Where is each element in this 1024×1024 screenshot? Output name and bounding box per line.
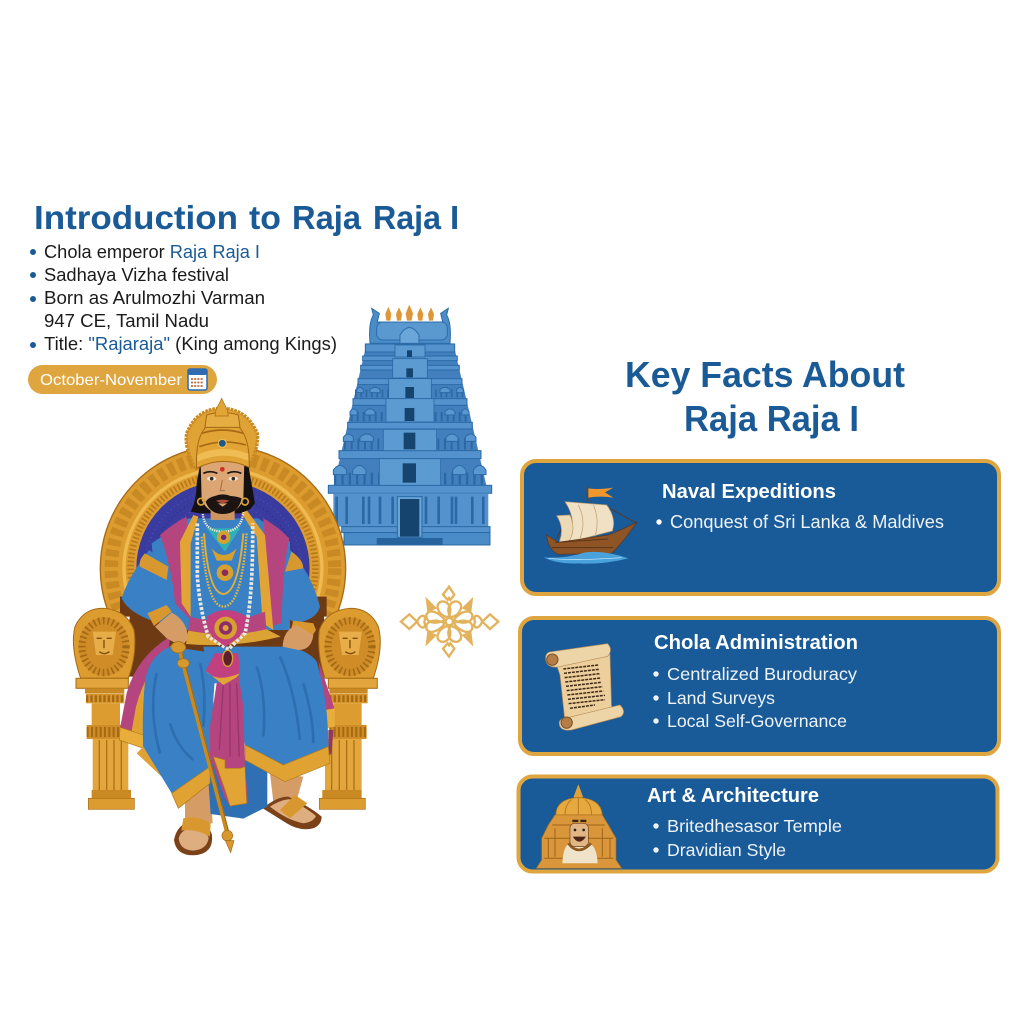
text: chola administration: Local Self-Governance (667, 711, 847, 731)
date pill: October-November: October-November (40, 372, 183, 389)
icon: palm-leaf scroll (546, 644, 624, 730)
panel: chola administration (520, 618, 999, 754)
text: naval expeditions: Naval Expeditions (662, 481, 836, 503)
king: royal staff (171, 642, 234, 853)
throne back (100, 450, 346, 617)
throne arm: right lion and pillar (319, 608, 380, 809)
illustration: gopuram temple tower (328, 305, 492, 545)
panel: introduction (28, 199, 459, 394)
bullet list: introduction facts: Chola emperor Raja Raja I (44, 242, 260, 262)
king: torso and arms (122, 510, 320, 650)
heading: key facts: Raja Raja I (684, 398, 859, 439)
bullet list: introduction facts: 947 CE, Tamil Nadu (44, 311, 209, 331)
throne arm: left lion and pillar (73, 608, 135, 809)
bullet list: introduction facts: Born as Arulmozhi Varman (44, 288, 265, 308)
illustration: seated king Raja Raja I on throne (73, 398, 380, 855)
text: chola administration (653, 632, 858, 731)
title: introduction: Raja (292, 199, 362, 236)
bullet list: introduction facts: Sadhaya Vizha festival (44, 265, 229, 285)
text: chola administration: Land Surveys (667, 688, 775, 708)
text: chola administration: Chola Administration (654, 632, 858, 654)
text: naval expeditions (656, 481, 944, 532)
title: introduction (34, 199, 459, 236)
text: chola administration: Centralized Buroduracy (667, 664, 857, 684)
text: art and architecture: Britedhesasor Temple (667, 816, 842, 836)
throne interior (127, 610, 330, 677)
king: head and crown (186, 398, 258, 520)
title: introduction: I (450, 199, 459, 236)
bullet list: introduction facts: Title: "Rajaraja" (King among Kings) (44, 334, 337, 354)
icon: golden temple (536, 784, 622, 868)
title: introduction: Raja (373, 199, 442, 236)
title: introduction: to (249, 199, 281, 236)
text: art and architecture: Art & Architecture (647, 785, 819, 807)
heading: key facts (625, 354, 905, 439)
text: art and architecture: Dravidian Style (667, 840, 786, 860)
king: robe (119, 637, 335, 808)
text: art and architecture (647, 785, 842, 860)
king: legs and sandals (174, 757, 322, 855)
heading: key facts: Key Facts About (625, 354, 905, 395)
panel: naval expeditions (522, 461, 999, 594)
text: naval expeditions: Conquest of Sri Lanka & Maldives (670, 512, 944, 532)
panel: art and architecture (518, 776, 998, 872)
title: introduction: Introduction (34, 199, 238, 236)
bullet list: introduction facts (30, 242, 337, 354)
icon: sailing ship (543, 487, 637, 564)
ornament: gold floral motif (401, 587, 498, 657)
date pill: October-November (28, 365, 217, 394)
king: necklaces and medallion (197, 512, 253, 685)
